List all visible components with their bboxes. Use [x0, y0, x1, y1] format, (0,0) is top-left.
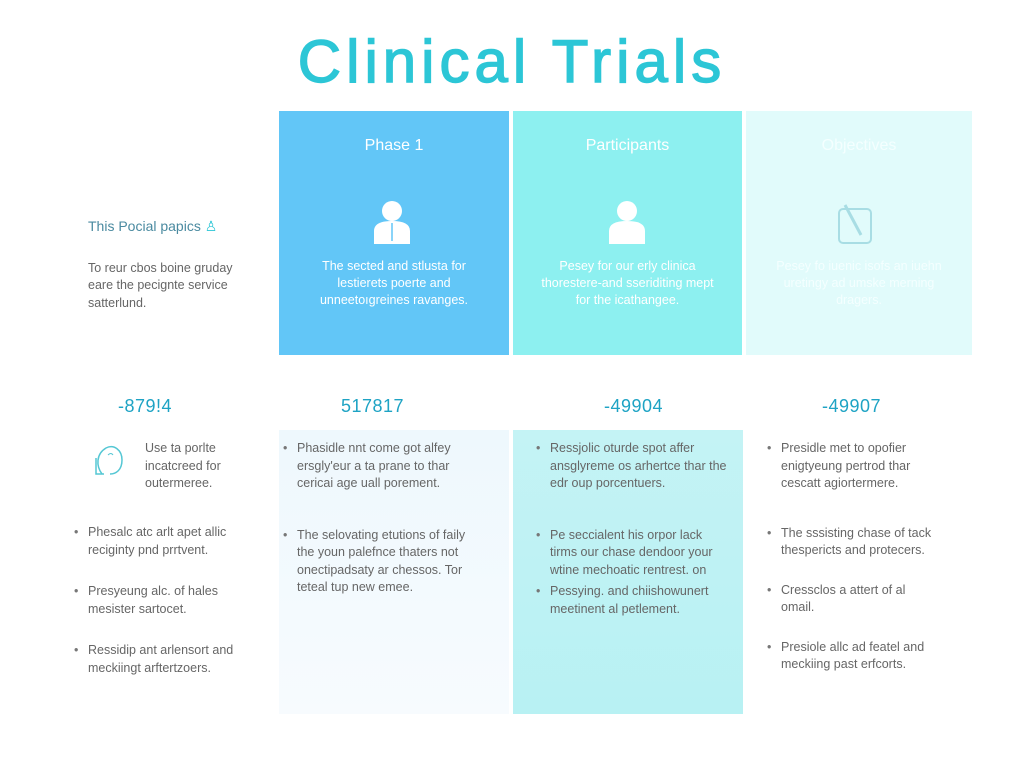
list: column 2: Pessying. and chiishowunert meetinent al petlement. [550, 584, 708, 616]
panel: phase 1 [279, 111, 509, 355]
panel: objectives: Objectives [822, 137, 896, 154]
panel: objectives [746, 111, 972, 355]
list: column 1 [284, 441, 465, 594]
list: column 0: Ressidip ant arlensort and meckiingt arftertzoers. [88, 643, 233, 674]
panel: objectives: Pesey fo iuenic isofs an iuehn uretingy ad umske merning dragers. [776, 259, 942, 307]
list: column 3: Presidle met to opofier enigtyeung pertrod thar cescatt agiortermere. [781, 441, 910, 490]
panel: participants [513, 111, 742, 355]
list: column 2: Pe seccialent his orpor lack tirms our chase dendoor your wtine mechoatic rentrest. on [550, 528, 713, 576]
panel: phase 1: The sected and stlusta for lestierets poerte and unneetoıgreines ravanges. [320, 259, 468, 307]
text: 517817 [341, 396, 404, 416]
list: column 3 [768, 441, 932, 671]
panel: participants: Participants [586, 137, 669, 154]
text: column 0: Use ta porlte incatcreed for outermeree. [145, 441, 221, 490]
icon: doctor [374, 201, 410, 244]
list: column 0: Presyeung alc. of hales mesister sartocet. [88, 584, 218, 616]
intro text: To reur cbos boine gruday eare the pecignte service satterlund. [88, 260, 233, 310]
intro text: This Pocial papics ♙ [88, 218, 217, 234]
list: column 1: The selovating etutions of faily the youn palefnce thaters not onectipadsaty ar chessos. Tor teteal tup new emee. [297, 528, 465, 594]
numbers: -879!4 [118, 396, 172, 416]
panel: participants: Pesey for our erly clinica thorestere-and sseriditing mept for the icathangee. [541, 259, 714, 307]
list: column 3: Cressclos a attert of al omail. [781, 582, 905, 614]
intro text [88, 218, 233, 310]
list: column 2: Ressjolic oturde spot affer ansglyreme os arhertce thar the edr oup porcentuers. [550, 441, 726, 490]
icon: patient [95, 446, 123, 475]
list: column 3: The sssisting chase of tack thespericts and protecers. [781, 526, 931, 557]
list: column 1: Phasidle nnt come got alfey ersgly'eur a ta prane to thar cericai age uall porement. [297, 441, 451, 490]
text: -49907 [822, 396, 881, 416]
bottom column backgrounds [279, 430, 509, 714]
text: -49904 [604, 396, 663, 416]
title: Clinical Trials [298, 28, 726, 95]
list: column 3: Presiole allc ad featel and meckiing past erfcorts. [781, 640, 924, 671]
panel: phase 1: Phase 1 [365, 137, 423, 154]
list: column 0 [74, 525, 233, 674]
list: column 2 [536, 441, 726, 616]
icon: person [609, 201, 645, 244]
list: column 0: Phesalc atc arlt apet allic reciginty pnd prrtvent. [88, 525, 226, 556]
icon: clipboard [838, 204, 872, 244]
